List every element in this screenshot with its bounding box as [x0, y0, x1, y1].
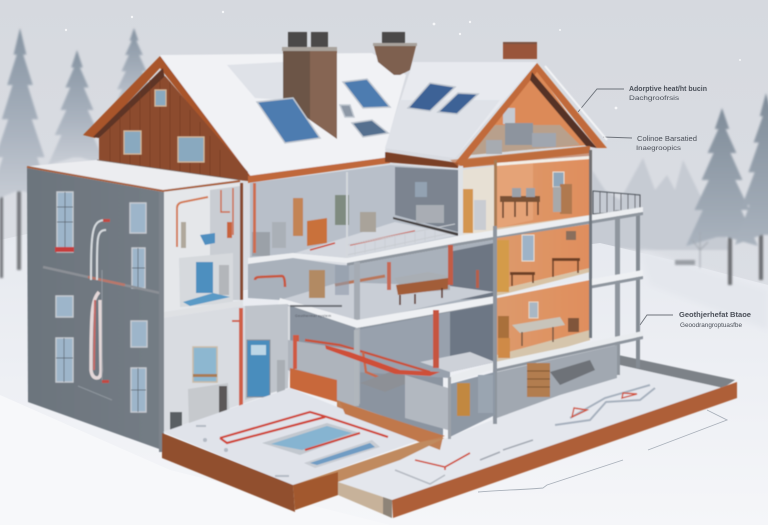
floor slab 3: [450, 304, 643, 424]
right gable attic: [455, 63, 607, 168]
callout: middle label: Colinoe Barsatied: [637, 134, 697, 143]
floor slab 1: [248, 207, 643, 266]
snow ground: [0, 234, 768, 525]
chimneys: [282, 32, 537, 139]
right foundation slab: [338, 350, 737, 518]
windows on exterior wall: [56, 192, 147, 412]
blueprint lines on snow: [478, 410, 727, 492]
snowflakes: [65, 11, 741, 109]
third floor rooms: [288, 304, 495, 437]
callout labels: [578, 84, 751, 329]
right second floor orange rooms: [497, 215, 592, 296]
red pipe loop: [220, 412, 388, 450]
callout: geothermal label: [640, 310, 751, 329]
left block roof deck: [27, 160, 240, 192]
floor slab 2: [278, 226, 643, 362]
left pine trees: [0, 28, 156, 278]
left block grey exterior wall: [27, 168, 163, 450]
callout: top label: Dachgroofrsis: [629, 95, 679, 102]
third floor rooms: Geothermal system: [295, 314, 331, 318]
callout: middle label: [603, 134, 697, 152]
callout: geothermal label: Geoodrangroptuasfbe: [680, 322, 742, 329]
lower left rooms and orange partition: [288, 330, 448, 450]
upper floor room: [250, 165, 458, 258]
main roof with snow: [83, 53, 537, 178]
right third floor orange rooms: [497, 270, 592, 368]
left block lower interior: [159, 192, 290, 452]
left gable timber wall: [99, 76, 248, 181]
second floor rooms: [248, 240, 494, 322]
skylights: [257, 79, 478, 143]
callout: top label: [578, 84, 707, 112]
distant forest: [590, 158, 730, 250]
callout: geothermal label: Geothjerhefat Btaoe: [679, 310, 751, 319]
front right upper rooms: [450, 146, 592, 238]
exterior pipes: [43, 219, 160, 400]
swimming pool basins: [262, 423, 380, 468]
eave band: [248, 152, 458, 183]
left foundation and snow floor: [162, 388, 445, 512]
right pine trees: [675, 93, 768, 285]
lower right rooms: [448, 345, 617, 439]
callout: top label: Adorptive heat/ht bucin: [629, 84, 707, 93]
callout: middle label: Inaegroopics: [636, 145, 681, 152]
right deck posts and railing: [593, 191, 640, 375]
left block upper interior: [163, 183, 243, 318]
